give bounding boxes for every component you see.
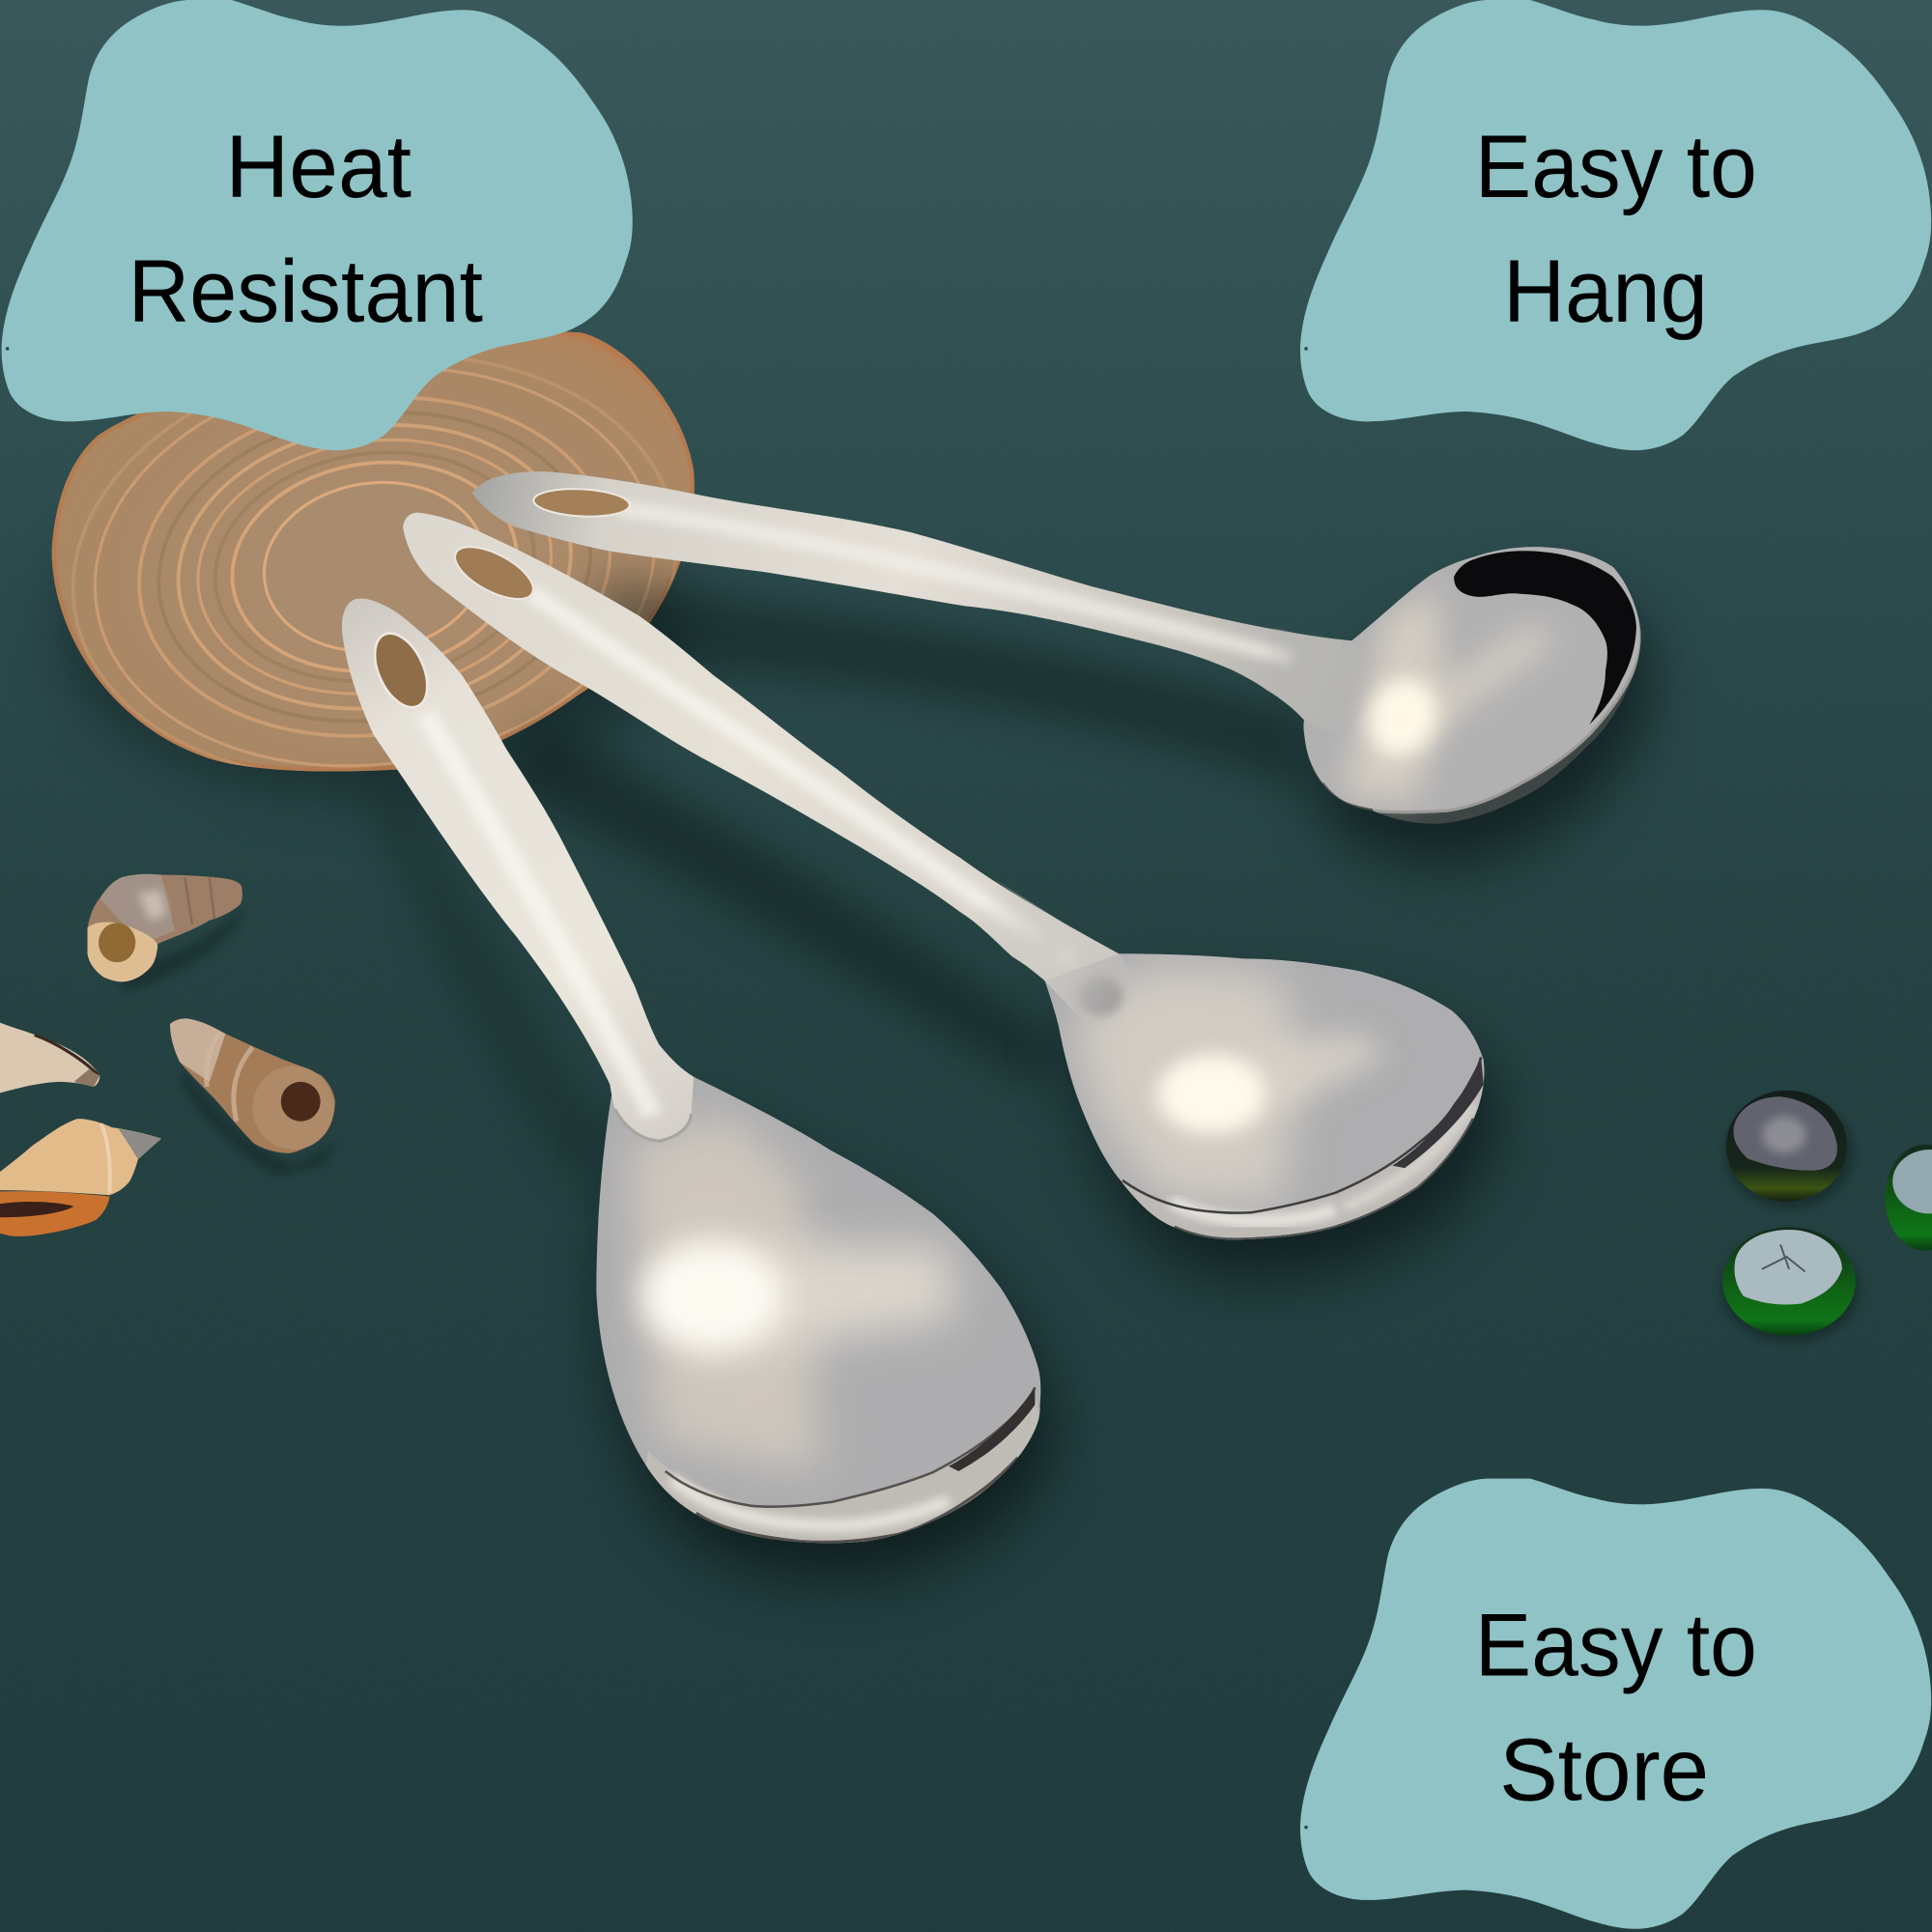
spoon neck over bowl: [585, 1033, 694, 1141]
shell: top spiral: [88, 874, 246, 992]
middle spoon neck blend: [974, 872, 1146, 1023]
label: Easy to Store: Easy to: [1475, 1597, 1757, 1695]
shell: left cone: [0, 1023, 99, 1093]
serving ladle: middle spoon: [403, 513, 1497, 1251]
callout: Easy to Hang: [1300, 0, 1931, 450]
pebble: right edge: [1886, 1145, 1932, 1251]
label: Easy to Store: Store: [1499, 1721, 1709, 1820]
label: Easy to Hang: Easy to: [1475, 118, 1757, 216]
pebble: dark grey: [1725, 1091, 1853, 1208]
callout: Easy to Store: [1300, 1479, 1931, 1929]
label: Heat Resistant: Heat: [225, 118, 412, 216]
label: Easy to Hang: [1475, 118, 1757, 341]
ceramic plate: [51, 332, 695, 806]
label: Heat Resistant: [128, 118, 483, 341]
callout: Heat Resistant: [2, 0, 633, 450]
rice spoon: front spoon: [342, 599, 1060, 1565]
shell: middle brown tube: [170, 1018, 339, 1177]
ladle neck blend: [1252, 622, 1380, 739]
seashells: [0, 874, 339, 1236]
label: Heat Resistant: Resistant: [128, 242, 483, 341]
ladle: back spoon: [472, 471, 1642, 824]
pebble: bright green: [1721, 1227, 1860, 1343]
label: Easy to Store: [1475, 1597, 1757, 1820]
label: Easy to Hang: Hang: [1503, 242, 1708, 341]
spoon shadows: [370, 579, 1653, 1580]
shell: lower conch: [0, 1119, 161, 1236]
glass pebbles: [1721, 1091, 1932, 1343]
